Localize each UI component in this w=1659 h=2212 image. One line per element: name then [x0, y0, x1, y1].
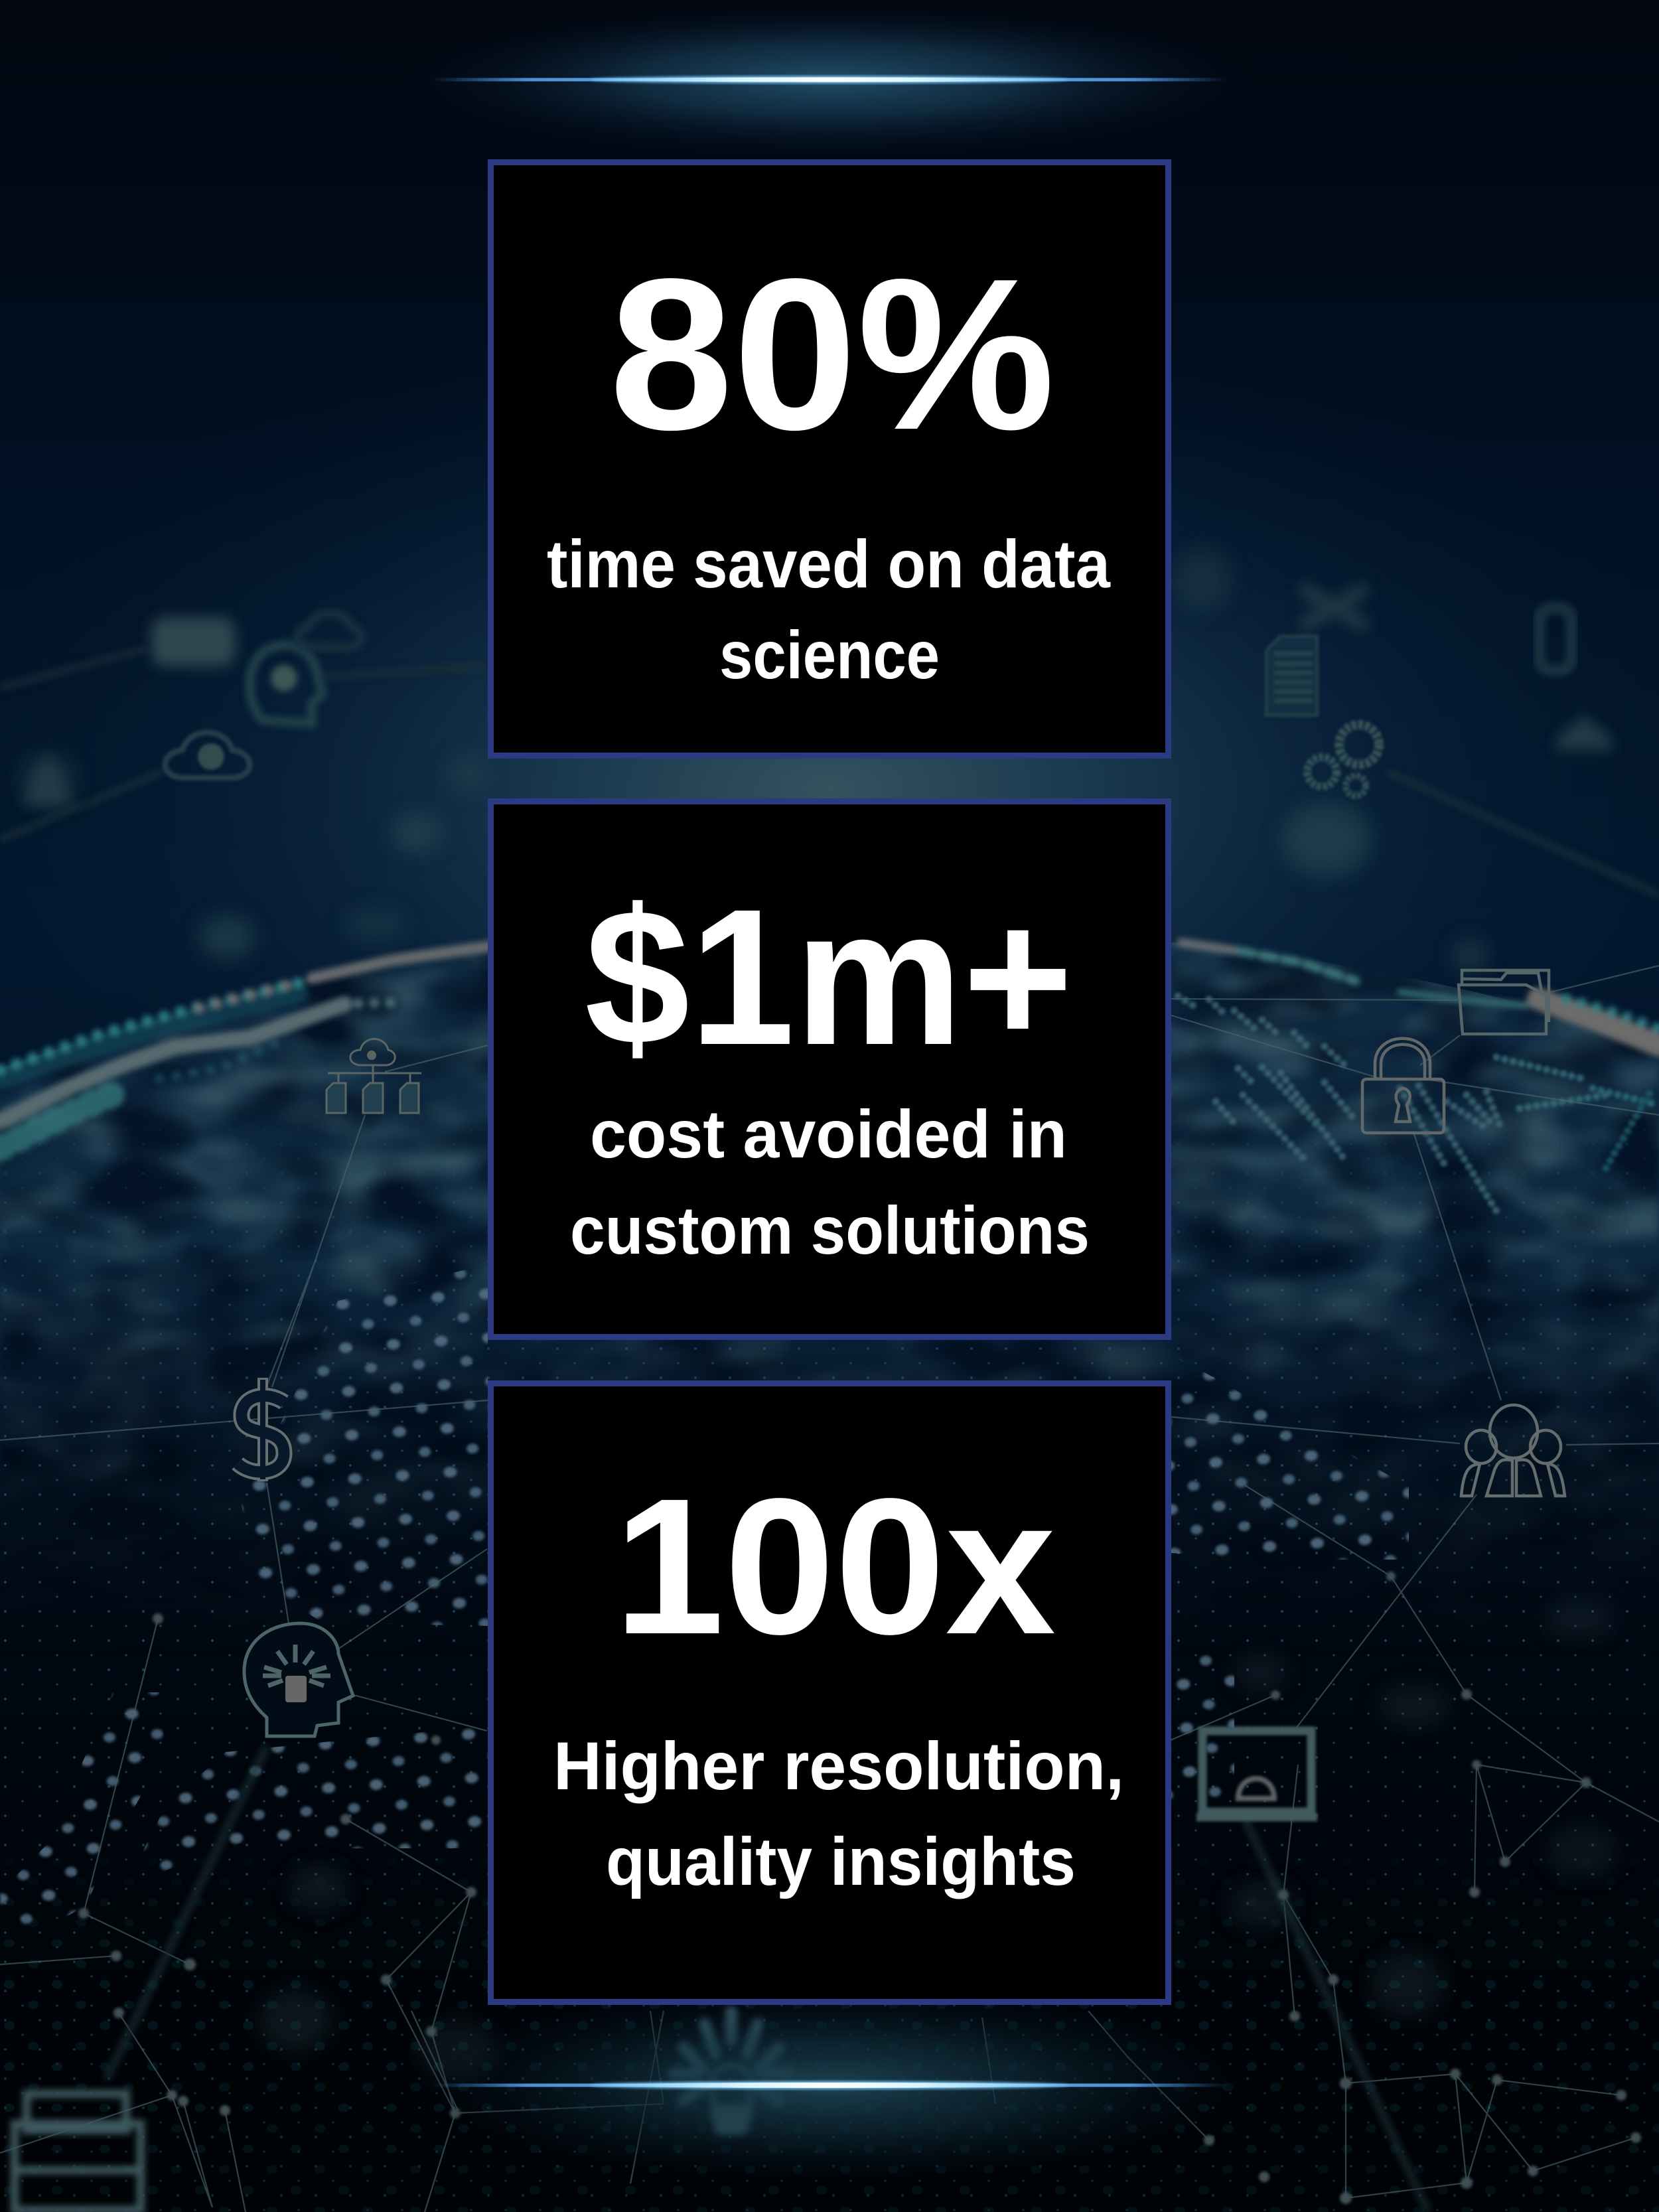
blurred icon: laptop [1196, 1731, 1317, 1817]
description: time saved on data science: time saved on data [547, 526, 1111, 602]
description: higher resolution, quality insights: Higher resolution, [553, 1728, 1124, 1804]
background: small dot grid [0, 1075, 1659, 2212]
description: cost avoided in custom solutions [570, 1096, 1090, 1268]
top glowing line [398, 1, 1261, 158]
stat: 100x: 100x [614, 1458, 1057, 1674]
icon: group of people [1461, 1405, 1565, 1496]
blurred icon: light bulb at the bottom [673, 2012, 790, 2134]
icon: cloud with document tree [326, 1039, 421, 1113]
background: globe with mottled land texture [0, 942, 1659, 1544]
description: time saved on data science: science [719, 617, 940, 693]
background: large halftone dot clusters [0, 1270, 1409, 1926]
background: central glow [0, 299, 1659, 1281]
blurred icon: cloud outline [298, 613, 362, 647]
description: cost avoided in custom solutions: custom solutions [570, 1193, 1090, 1268]
bottom glowing line [405, 1986, 1254, 2185]
network nodes [78, 1572, 1641, 2204]
icon: padlock [1362, 1039, 1444, 1133]
faint thick diagonal light streaks [0, 649, 1659, 2212]
panel: $1m+ cost avoided [491, 802, 1168, 1337]
globe horizon bands [0, 942, 1659, 1148]
globe diagonal dot streaks [1178, 996, 1659, 1211]
background: teal dot grid at the bottom [4, 1898, 1659, 2212]
stat: $1m+: $1m+ [585, 869, 1073, 1085]
stat: 80%: 80% [609, 234, 1055, 475]
blurred icon: server stack [15, 2094, 141, 2210]
description: higher resolution, quality insights [553, 1728, 1124, 1899]
panel: 100x higher resolution [491, 1383, 1168, 2002]
soft round bokeh glows [20, 548, 1619, 2081]
blurred icon: document [1266, 636, 1317, 715]
icon: dollar sign [238, 1378, 284, 1481]
icon: gears [1307, 725, 1379, 796]
blurred icon: head with gear [250, 645, 323, 723]
description: cost avoided in custom solutions: cost avoided in [590, 1096, 1067, 1172]
blurred icon: cloud bar [1556, 713, 1614, 750]
icon: head with light bulb [244, 1623, 353, 1736]
network connection lines [0, 966, 1659, 2212]
blurred icon: ID card [151, 617, 235, 666]
blurred icon: triangle [21, 755, 74, 804]
panel: 80% time saved [491, 162, 1168, 755]
description: time saved on data science [547, 526, 1111, 693]
blurred icon: phone [1540, 608, 1571, 670]
icon: folder [1459, 970, 1549, 1034]
blurred icon: crossed shape [1301, 587, 1367, 627]
blurred icon: cloud with gear [165, 733, 250, 778]
description: higher resolution, quality insights: quality insights [606, 1824, 1076, 1899]
